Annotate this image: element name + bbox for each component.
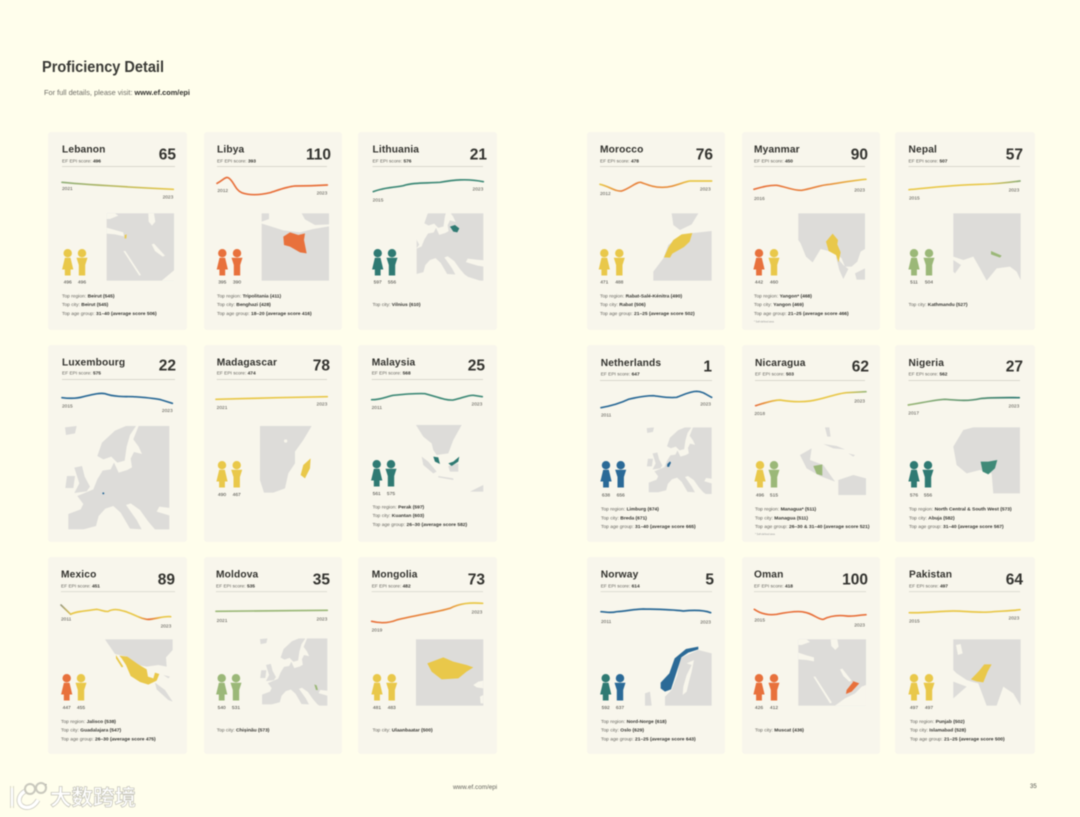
rank: 65 (159, 146, 176, 164)
EF EPI score: EF EPI score: 575 (62, 370, 101, 376)
trend line: 2012 (217, 188, 228, 194)
male score icon: 497 (925, 705, 933, 711)
country name: Norway (601, 570, 639, 580)
trend line: 2023 (854, 398, 865, 404)
male score icon: 467 (233, 492, 241, 498)
EF EPI score: EF EPI score: 576 (372, 158, 412, 164)
EF EPI score: EF EPI score: 535 (216, 584, 255, 590)
trend line (601, 609, 711, 626)
country name: Nigeria (908, 358, 944, 369)
top region, city and age group: Top region: Yangon* (468) (754, 294, 812, 300)
top region, city and age group: Top city: Managua (511) (755, 515, 808, 521)
rank: 78 (313, 358, 330, 374)
trend line: 2023 (161, 624, 172, 630)
card: Libya (204, 132, 342, 330)
trend line: 2011 (601, 412, 612, 418)
top region, city and age group: Top region: Tripolitania (411) (217, 294, 282, 300)
trend line (216, 610, 328, 624)
rank: 62 (852, 359, 869, 376)
trend line: 2023 (163, 194, 174, 200)
card: Netherlands (587, 345, 727, 542)
card: Lebanon (48, 132, 187, 330)
EF EPI score: EF EPI score: 478 (600, 158, 639, 164)
top region, city and age group (62, 294, 157, 317)
trend line: 2023 (317, 402, 328, 408)
male score icon: 637 (616, 705, 624, 711)
male score icon (768, 249, 780, 286)
top region, city and age group: Top age group: 26–30 & 31–40 (average score 521) (755, 524, 870, 530)
country name: Oman (754, 570, 783, 580)
trend line: 2021 (62, 186, 73, 192)
EF EPI score: EF EPI score: 418 (754, 584, 793, 590)
country name: Nicaragua (755, 358, 806, 369)
trend line: 2015 (62, 403, 73, 409)
female score icon: 511 (910, 280, 918, 286)
top city: Top city: Vilnius (610) (372, 302, 421, 308)
male score icon (614, 674, 626, 711)
trend line: 2015 (373, 197, 384, 203)
trend line: 2011 (61, 617, 72, 623)
EF EPI score: EF EPI score: 496 (62, 158, 101, 164)
top region, city and age group: Top age group: 21–25 (average score 466) (754, 311, 849, 317)
female score icon (217, 249, 228, 286)
rank: 89 (158, 571, 175, 588)
top city: Top city: Muscat (436) (755, 728, 804, 734)
top region, city and age group: Top city: Guadalajara (547) (61, 728, 121, 734)
trend line: 2023 (1009, 615, 1020, 621)
trend line (217, 177, 328, 197)
female score icon (600, 461, 612, 498)
rank: 1 (703, 359, 712, 376)
country name: Lithuania (372, 144, 419, 156)
card: Nicaragua (742, 345, 880, 542)
EF EPI score: EF EPI score: 474 (217, 370, 256, 376)
EF EPI score: EF EPI score: 450 (754, 158, 793, 164)
trend line: 2018 (754, 411, 765, 417)
top region, city and age group: Top region: Jalisco (538) (61, 719, 116, 725)
top region, city and age group: Top age group: 31–40 (average score 567) (909, 524, 1004, 530)
trend line (601, 391, 712, 418)
top city: Top city: Kathmandu (527) (908, 302, 968, 308)
female score icon: 597 (374, 280, 382, 286)
top region, city and age group: Top age group: 31–40 (average score 506) (62, 311, 157, 317)
male score icon: 656 (617, 492, 625, 498)
top region, city and age group (601, 719, 696, 742)
card: Morocco (587, 132, 725, 330)
map: Europe with Netherlands highlighted (647, 427, 727, 501)
male score icon (231, 461, 242, 498)
trend line (372, 394, 483, 411)
male score icon: 412 (770, 705, 778, 711)
map: West Africa with Nigeria highlighted (953, 427, 1020, 493)
map: North Africa with Libya highlighted (262, 213, 329, 281)
card: Nigeria (895, 345, 1035, 542)
top region, city and age group (372, 504, 468, 528)
map: Mongolia highlighted (416, 639, 483, 706)
top region, city and age group: Top city: Beirut (545) (62, 302, 109, 308)
top region, city and age group: Top region: Managua* (511) (755, 507, 817, 513)
trend line (909, 610, 1020, 624)
female score icon (216, 674, 227, 711)
map: Middle East with Oman highlighted (798, 639, 866, 706)
EF EPI score: EF EPI score: 393 (217, 158, 256, 164)
male score icon (386, 249, 398, 286)
trend line: 2023 (473, 187, 484, 193)
male score icon: 455 (77, 705, 85, 711)
top region, city and age group: Top region: Nord-Norge (618) (601, 719, 667, 725)
female score icon (908, 674, 920, 711)
female score icon (599, 249, 610, 286)
female score icon (371, 460, 382, 497)
male score icon: 460 (770, 280, 778, 286)
map: Southeast Asia with Malaysia highlighted (416, 425, 483, 492)
page number left: 34 (41, 784, 47, 790)
country name: Pakistan (909, 570, 952, 580)
trend line (600, 181, 712, 197)
trend line: 2023 (854, 187, 865, 193)
male score icon (924, 249, 934, 286)
map: Scandinavia with Norway highlighted (645, 647, 712, 706)
top region, city and age group: Top city: Oslo (629) (601, 728, 644, 734)
top region, city and age group: Top region: Perak (597) (372, 504, 425, 510)
male score icon: 531 (232, 705, 240, 711)
female score icon: 496 (756, 492, 764, 498)
trend line: 2023 (1009, 404, 1020, 410)
top region, city and age group: Top age group: 26–30 (average score 582) (372, 522, 468, 528)
EF EPI score: EF EPI score: 497 (909, 584, 948, 590)
trend line (372, 603, 483, 633)
top region, city and age group: Top region: Punjab (502) (910, 719, 965, 725)
top region, city and age group: * Self-defined area (755, 533, 775, 536)
map: South Asia with Pakistan highlighted (953, 639, 1021, 706)
card: Madagascar (204, 345, 342, 542)
top region, city and age group (61, 719, 156, 742)
trend line: 2011 (601, 619, 612, 625)
female score icon (371, 674, 383, 711)
country name: Mexico (61, 570, 96, 580)
female score icon: 447 (63, 705, 71, 711)
female score icon: 442 (755, 280, 763, 286)
subtitle: link to full details: For full details, please visit: www.ef.com/epi (44, 88, 190, 97)
card: Mongolia (358, 557, 497, 754)
map: Mexico highlighted (105, 639, 173, 702)
female score icon (372, 249, 383, 286)
map: Middle East with Lebanon highlighted (107, 213, 174, 281)
trend line (908, 398, 1020, 416)
trend line: 2019 (372, 627, 383, 633)
top region, city and age group: Top age group: 18–20 (average score 416) (217, 311, 312, 317)
male score icon (768, 674, 780, 711)
top region, city and age group: Top age group: 21–25 (average score 502) (600, 311, 695, 317)
country name: Netherlands (601, 358, 661, 369)
card: Moldova (204, 557, 342, 754)
card: Nepal (895, 132, 1035, 330)
card: Luxembourg (48, 345, 193, 543)
trend line (216, 397, 328, 411)
country name: Malaysia (372, 358, 416, 368)
card: Mexico (48, 557, 187, 754)
card: Malaysia (358, 345, 497, 542)
trend line: 2021 (217, 405, 228, 411)
country name: Luxembourg (62, 358, 125, 368)
trend line (373, 180, 484, 203)
country name: Madagascar (217, 358, 277, 368)
top region, city and age group (601, 507, 696, 530)
male score icon: 556 (388, 280, 396, 286)
male score icon: 556 (924, 492, 932, 498)
male score icon (615, 461, 626, 498)
male score icon (386, 460, 396, 497)
top region, city and age group: Top city: Breda (671) (601, 515, 647, 521)
rank: 22 (159, 358, 176, 374)
male score icon: 390 (233, 280, 241, 286)
trend line: 2023 (854, 623, 865, 629)
footer url: www.ef.com/epi (452, 784, 497, 791)
top region, city and age group: Top city: Benghazi (428) (217, 302, 271, 308)
male score icon (230, 674, 242, 711)
top region, city and age group: Top age group: 21–25 (average score 643) (601, 736, 696, 742)
trend line: 2021 (217, 618, 228, 624)
top region, city and age group: Top region: Rabat-Salé-Kénitra (490) (600, 294, 682, 300)
country name: Morocco (600, 144, 644, 156)
trend line: 2023 (317, 616, 328, 622)
rank: 76 (696, 146, 713, 164)
female score icon: 490 (218, 492, 226, 498)
female score icon: 561 (373, 491, 381, 497)
country name: Moldova (216, 570, 259, 580)
trend line: 2015 (909, 195, 920, 201)
rank: 64 (1006, 571, 1023, 588)
female score icon: 426 (755, 705, 763, 711)
trend line: 2015 (754, 618, 765, 624)
trend line: 2023 (472, 609, 483, 615)
trend line: 2016 (754, 196, 765, 202)
trend line: 2023 (472, 402, 483, 408)
EF EPI score: EF EPI score: 503 (755, 372, 794, 378)
female score icon: 497 (910, 705, 918, 711)
top region, city and age group: * Self-defined area (754, 320, 774, 324)
EF EPI score: EF EPI score: 482 (372, 584, 411, 590)
trend line (754, 392, 866, 417)
female score icon: 496 (64, 280, 72, 286)
top region, city and age group: Top city: Rabat (506) (600, 302, 646, 308)
map: Europe with Luxembourg highlighted (65, 426, 193, 543)
female score icon (61, 674, 72, 711)
male score icon (922, 461, 934, 498)
rank: 25 (468, 358, 485, 374)
EF EPI score: EF EPI score: 507 (908, 158, 948, 164)
EF EPI score: EF EPI score: 647 (601, 372, 640, 378)
map: Central America with Nicaragua highlighted (800, 427, 866, 495)
watermark text: 大数跨境 (50, 781, 136, 812)
map: Southeast Asia with Myanmar highlighted (798, 213, 865, 280)
trend line: 2017 (908, 410, 919, 416)
trend line: 2023 (700, 187, 711, 193)
trend line: 2023 (317, 191, 328, 197)
female score icon (62, 249, 73, 286)
top city: Top city: Ulaanbaatar (500) (372, 728, 433, 734)
top region, city and age group: Top age group: 31–40 (average score 665) (601, 524, 696, 530)
top region, city and age group (909, 507, 1012, 530)
female score icon: 471 (600, 280, 609, 286)
rank: 110 (306, 146, 331, 164)
trend line (754, 609, 866, 629)
male score icon (232, 249, 242, 286)
top region, city and age group (755, 507, 870, 536)
top region, city and age group (910, 719, 1005, 742)
trend line: 2012 (600, 191, 611, 197)
rank: 35 (313, 571, 330, 588)
EF EPI score: EF EPI score: 568 (372, 370, 411, 376)
card: Myanmar (742, 132, 880, 330)
card: Norway (587, 557, 725, 754)
map: Morocco highlighted (653, 213, 712, 281)
trend line (61, 605, 172, 630)
top region, city and age group: Top city: Kuantan (603) (372, 513, 425, 519)
EF EPI score: EF EPI score: 562 (908, 372, 948, 378)
female score icon (600, 674, 611, 711)
male score icon: 575 (387, 491, 395, 497)
EF EPI score: EF EPI score: 451 (61, 584, 100, 590)
male score icon (386, 674, 397, 711)
EF EPI score: EF EPI score: 614 (601, 584, 640, 590)
map: South Asia with Nepal highlighted (953, 213, 1021, 281)
title: Proficiency Detail (42, 59, 164, 76)
top region, city and age group: Top city: Yangon (469) (754, 302, 804, 308)
top region, city and age group (754, 294, 849, 324)
top region, city and age group (600, 294, 695, 317)
card: Pakistan (895, 557, 1035, 754)
male score icon: 504 (925, 280, 933, 286)
female score icon (908, 249, 920, 286)
female score icon (908, 461, 920, 498)
watermark logo (10, 783, 46, 808)
map: Europe with Moldova highlighted (260, 638, 342, 713)
trend line (754, 179, 866, 202)
trend line: 2011 (372, 405, 382, 411)
rank: 90 (851, 146, 868, 164)
top region, city and age group: Top region: Beirut (545) (62, 294, 115, 300)
trend line: 2023 (700, 620, 711, 626)
top region, city and age group: Top city: Islamabad (528) (910, 728, 966, 734)
female score icon (216, 461, 228, 498)
male score icon (924, 674, 934, 711)
female score icon: 592 (602, 705, 610, 711)
male score icon (76, 674, 86, 711)
map: East Africa with Madagascar highlighted (260, 426, 312, 493)
card: Lithuania (358, 132, 497, 330)
top region, city and age group: Top age group: 26–30 (average score 475) (61, 736, 156, 742)
rank: 21 (470, 146, 487, 164)
trend line: 2023 (1009, 188, 1020, 194)
female score icon: 481 (373, 705, 381, 711)
male score icon (768, 461, 780, 498)
female score icon (753, 249, 765, 286)
page number right: 35 (1030, 784, 1037, 790)
country name: Libya (217, 144, 245, 156)
male score icon: 496 (78, 280, 86, 286)
trend line (62, 393, 173, 414)
top region, city and age group: Top city: Abuja (582) (909, 515, 955, 521)
female score icon: 576 (910, 492, 918, 498)
rank: 27 (1006, 359, 1023, 376)
female score icon (753, 674, 765, 711)
female score icon: 638 (602, 492, 610, 498)
male score icon (76, 249, 88, 286)
male score icon: 515 (770, 492, 778, 498)
card: Oman (742, 557, 880, 754)
male score icon: 488 (615, 280, 624, 286)
trend line: 2015 (909, 618, 920, 624)
rank: 100 (842, 571, 868, 588)
male score icon: 483 (388, 705, 396, 711)
country name: Myanmar (754, 144, 800, 156)
top region, city and age group: Top region: North Central & South West (573) (909, 507, 1012, 513)
top region, city and age group: Top age group: 21–25 (average score 500) (910, 736, 1005, 742)
country name: Mongolia (372, 570, 418, 580)
trend line: 2023 (700, 402, 711, 408)
rank: 57 (1006, 146, 1023, 164)
trend line (62, 182, 174, 200)
male score icon (614, 249, 625, 286)
top city: Top city: Chișinău (573) (217, 728, 270, 734)
female score icon: 395 (218, 280, 227, 286)
trend line: 2023 (162, 408, 173, 414)
female score icon: 540 (218, 705, 226, 711)
map: Europe with Lithuania highlighted (402, 202, 491, 284)
country name: Nepal (908, 144, 937, 156)
trend line (909, 181, 1020, 201)
top region, city and age group (217, 294, 312, 317)
rank: 73 (468, 571, 485, 588)
top region, city and age group: Top region: Limburg (674) (601, 507, 659, 513)
country name: Lebanon (62, 144, 106, 156)
female score icon (754, 461, 766, 498)
rank: 5 (705, 571, 714, 588)
